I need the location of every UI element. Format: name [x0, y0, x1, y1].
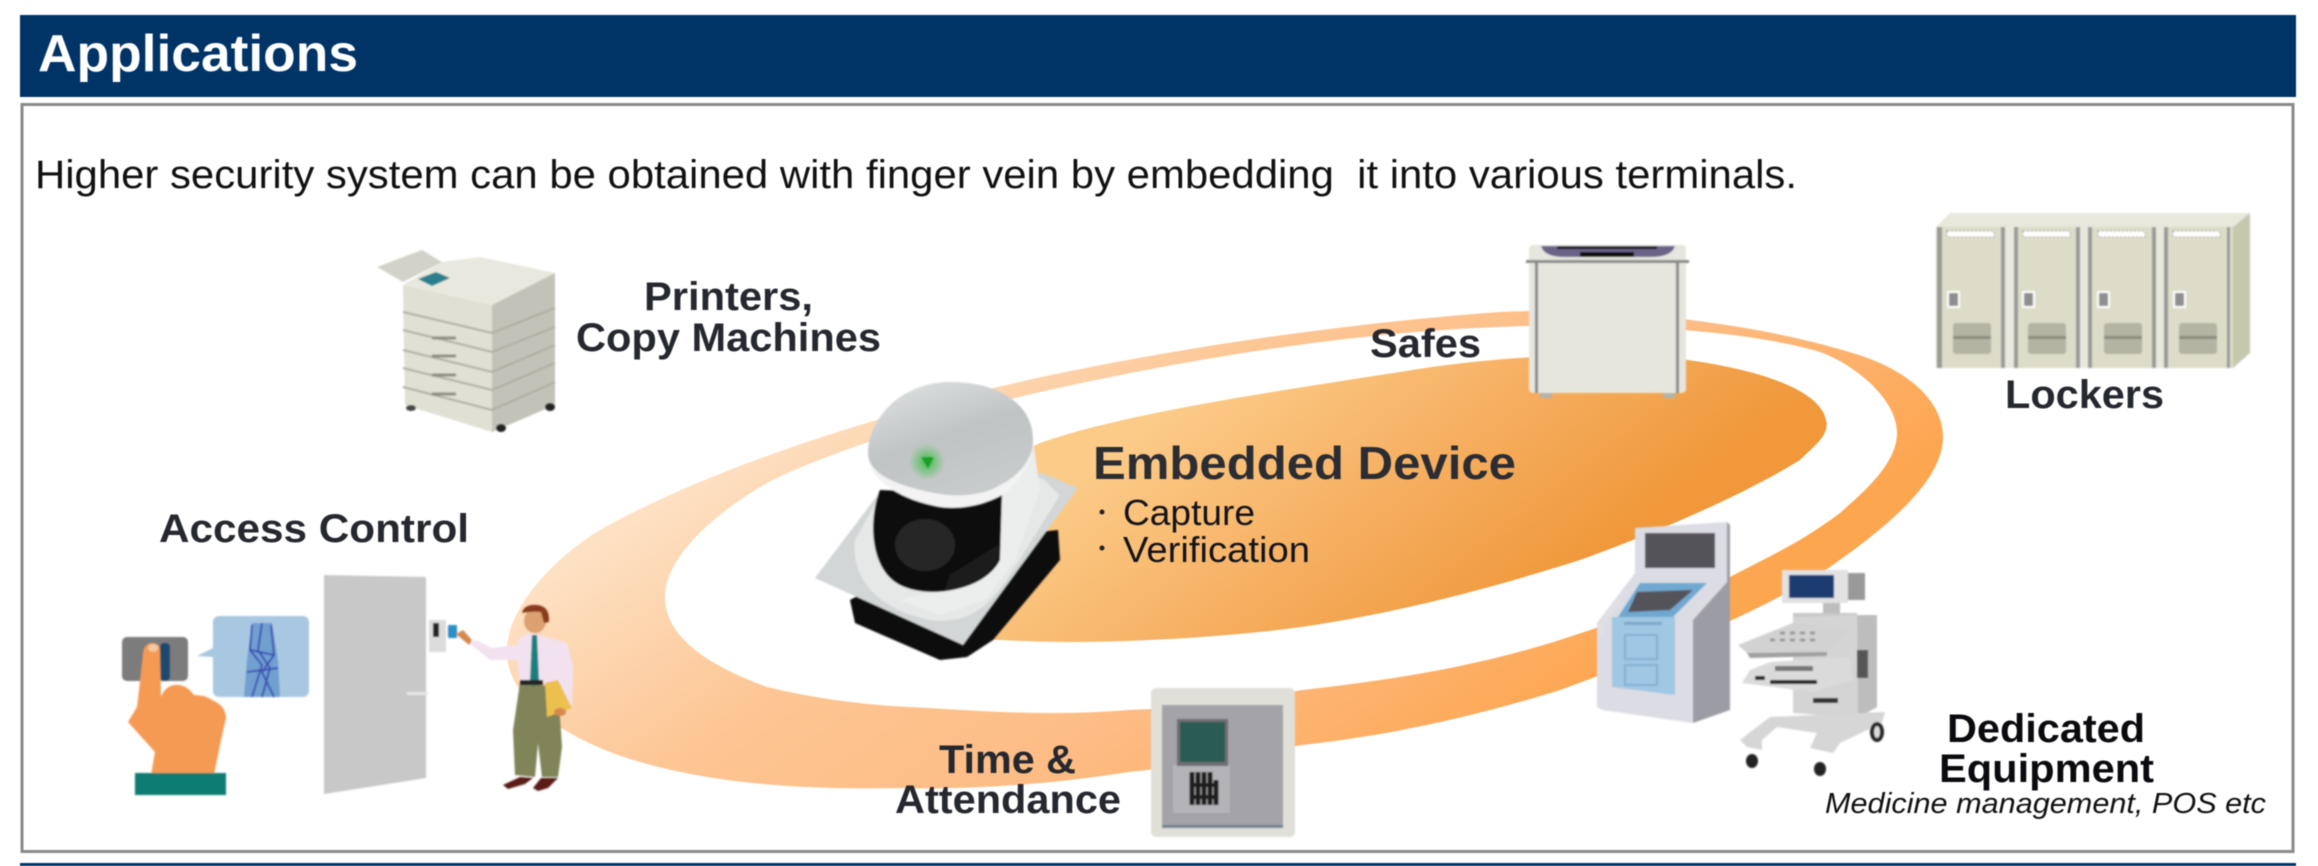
- icon: lockers: [1936, 213, 2250, 368]
- label: dedicated equipment: Dedicated: [1947, 707, 2145, 751]
- label: safes: Safes: [1370, 322, 1481, 366]
- header bar: [20, 15, 2296, 97]
- bullet: capture: Capture: [1123, 492, 1255, 533]
- label: dedicated equipment: [1825, 707, 2267, 820]
- label: time and attendance: Time &: [939, 738, 1076, 782]
- label: lockers: Lockers: [2005, 373, 2164, 417]
- icon: man with card: [456, 605, 573, 791]
- label: time and attendance: [895, 738, 1121, 822]
- icon: finger on reader: [122, 637, 226, 795]
- caption: medicine management: Medicine management, POS etc: [1825, 788, 2267, 820]
- label: printers, copy machines: Copy Machines: [576, 316, 881, 360]
- orbit ring: [507, 311, 1943, 788]
- intro text: Higher security system can be obtained with finger vein by embedding it into various terminals.: [35, 153, 1797, 197]
- central orange ellipse: [939, 355, 1827, 642]
- next section bar edge: [20, 863, 2296, 866]
- label: embedded device: Embedded Device: [1093, 437, 1516, 489]
- label: time and attendance: Attendance: [895, 778, 1121, 822]
- icon: time and attendance terminal: [1151, 688, 1295, 837]
- icon: printer: [377, 250, 555, 432]
- icon: safe: [1526, 245, 1689, 398]
- icon: embedded finger vein device: [815, 382, 1078, 660]
- icon: vein image callout: [197, 616, 309, 697]
- heading: Applications: Applications: [38, 25, 358, 83]
- icon: ultrasound cart: [1738, 570, 1885, 776]
- label: access control: Access Control: [159, 507, 469, 551]
- label: embedded device: [1093, 437, 1516, 570]
- icon: door: [324, 575, 428, 794]
- label: dedicated equipment: Equipment: [1939, 747, 2154, 791]
- bullet: verification: Verification: [1123, 529, 1310, 570]
- label: printers, copy machines: [576, 275, 881, 360]
- label: printers, copy machines: Printers,: [644, 275, 813, 319]
- icon: wall card reader: [429, 620, 457, 652]
- icon: medicine kiosk: [1597, 522, 1730, 723]
